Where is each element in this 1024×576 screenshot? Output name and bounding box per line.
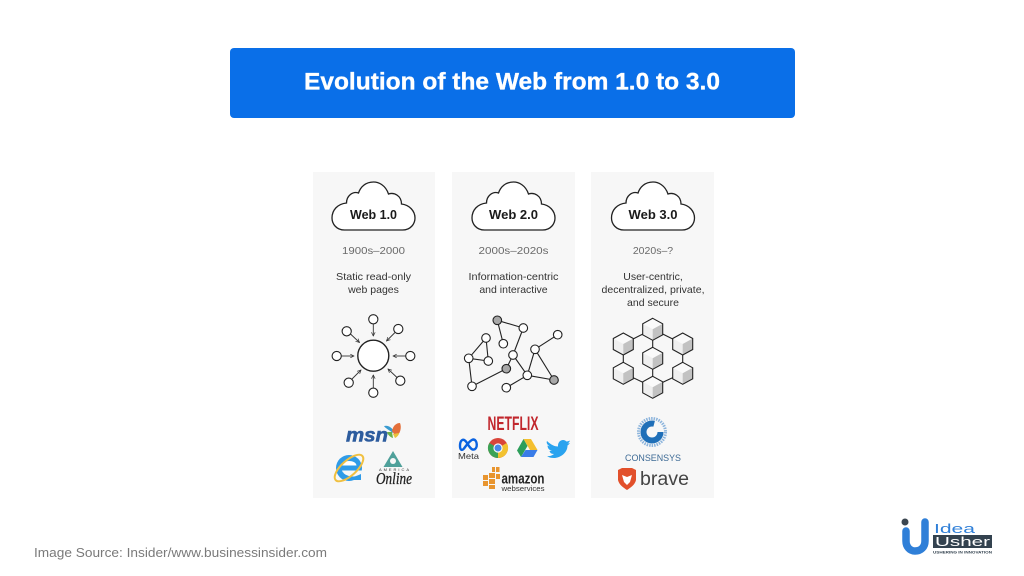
logo: Consensys bbox=[625, 418, 681, 464]
logo: Meta bbox=[458, 440, 479, 461]
logo: Amazon Web Services bbox=[483, 467, 545, 493]
icon: Web 3.0 cloud: Web 3.0 bbox=[629, 207, 677, 222]
logo: America Online bbox=[376, 451, 412, 488]
Web 1.0 years: 1900s–2000 bbox=[342, 245, 405, 257]
icon: Web 2.0 cloud: Web 2.0 bbox=[489, 207, 538, 222]
panel: Web 1.0 bbox=[313, 172, 435, 498]
panel: Web 2.0 bbox=[452, 172, 575, 498]
logo: Internet Explorer bbox=[331, 450, 367, 486]
image source caption: Image Source: Insider/www.businessinsider.com bbox=[34, 545, 327, 560]
logo: Idea Usher: Idea bbox=[934, 521, 976, 536]
logo: Idea Usher bbox=[902, 518, 992, 554]
Web 2.0 years: 2000s–2020s bbox=[478, 245, 548, 257]
logo: Meta: Meta bbox=[458, 451, 479, 461]
logo: Amazon Web Services: amazon bbox=[502, 472, 544, 488]
Web 3.0 description: and secure bbox=[627, 297, 679, 309]
Web 2.0 description: Information-centric bbox=[468, 271, 558, 283]
icon: Web 1.0 cloud: Web 1.0 bbox=[350, 207, 397, 222]
Web 3.0 years: 2020s–? bbox=[633, 245, 673, 257]
Web 1.0 description: web pages bbox=[347, 284, 399, 296]
diagram: blockchain hexagons bbox=[613, 318, 693, 398]
Web 3.0 description: User-centric, bbox=[623, 271, 683, 283]
logo: Consensys: CONSENSYS bbox=[625, 453, 681, 464]
Web 2.0 description: and interactive bbox=[479, 284, 548, 296]
logo: Brave: brave bbox=[640, 469, 689, 490]
panel: Web 3.0 bbox=[591, 172, 714, 498]
logo: msn bbox=[346, 423, 401, 446]
logo: America Online: AMERICA bbox=[379, 467, 409, 472]
logo: Brave bbox=[618, 468, 689, 490]
logo: America Online: Online bbox=[376, 469, 412, 488]
logo: Idea Usher: USHERING IN INNOVATION bbox=[933, 550, 992, 554]
title text: Evolution of the Web from 1.0 to 3.0 bbox=[304, 68, 720, 96]
logo: Netflix: NETFLIX bbox=[488, 414, 539, 435]
diagram: peer network bbox=[464, 316, 562, 392]
title banner bbox=[230, 48, 795, 118]
logo: Amazon Web Services: webservices bbox=[500, 484, 545, 493]
logo: msn: msn bbox=[346, 424, 388, 446]
logo: Idea Usher: Usher bbox=[935, 535, 990, 549]
icon: Web 1.0 cloud bbox=[332, 182, 415, 230]
diagram: hub with inward arrows bbox=[332, 315, 415, 397]
logo: Twitter bbox=[547, 440, 570, 458]
Web 1.0 description: Static read-only bbox=[336, 271, 412, 283]
logo: Chrome bbox=[488, 438, 508, 458]
Web 3.0 description: decentralized, private, bbox=[602, 284, 704, 296]
icon: Web 2.0 cloud bbox=[472, 182, 555, 230]
icon: Web 3.0 cloud bbox=[612, 182, 694, 230]
logo: Google Drive bbox=[517, 439, 538, 457]
